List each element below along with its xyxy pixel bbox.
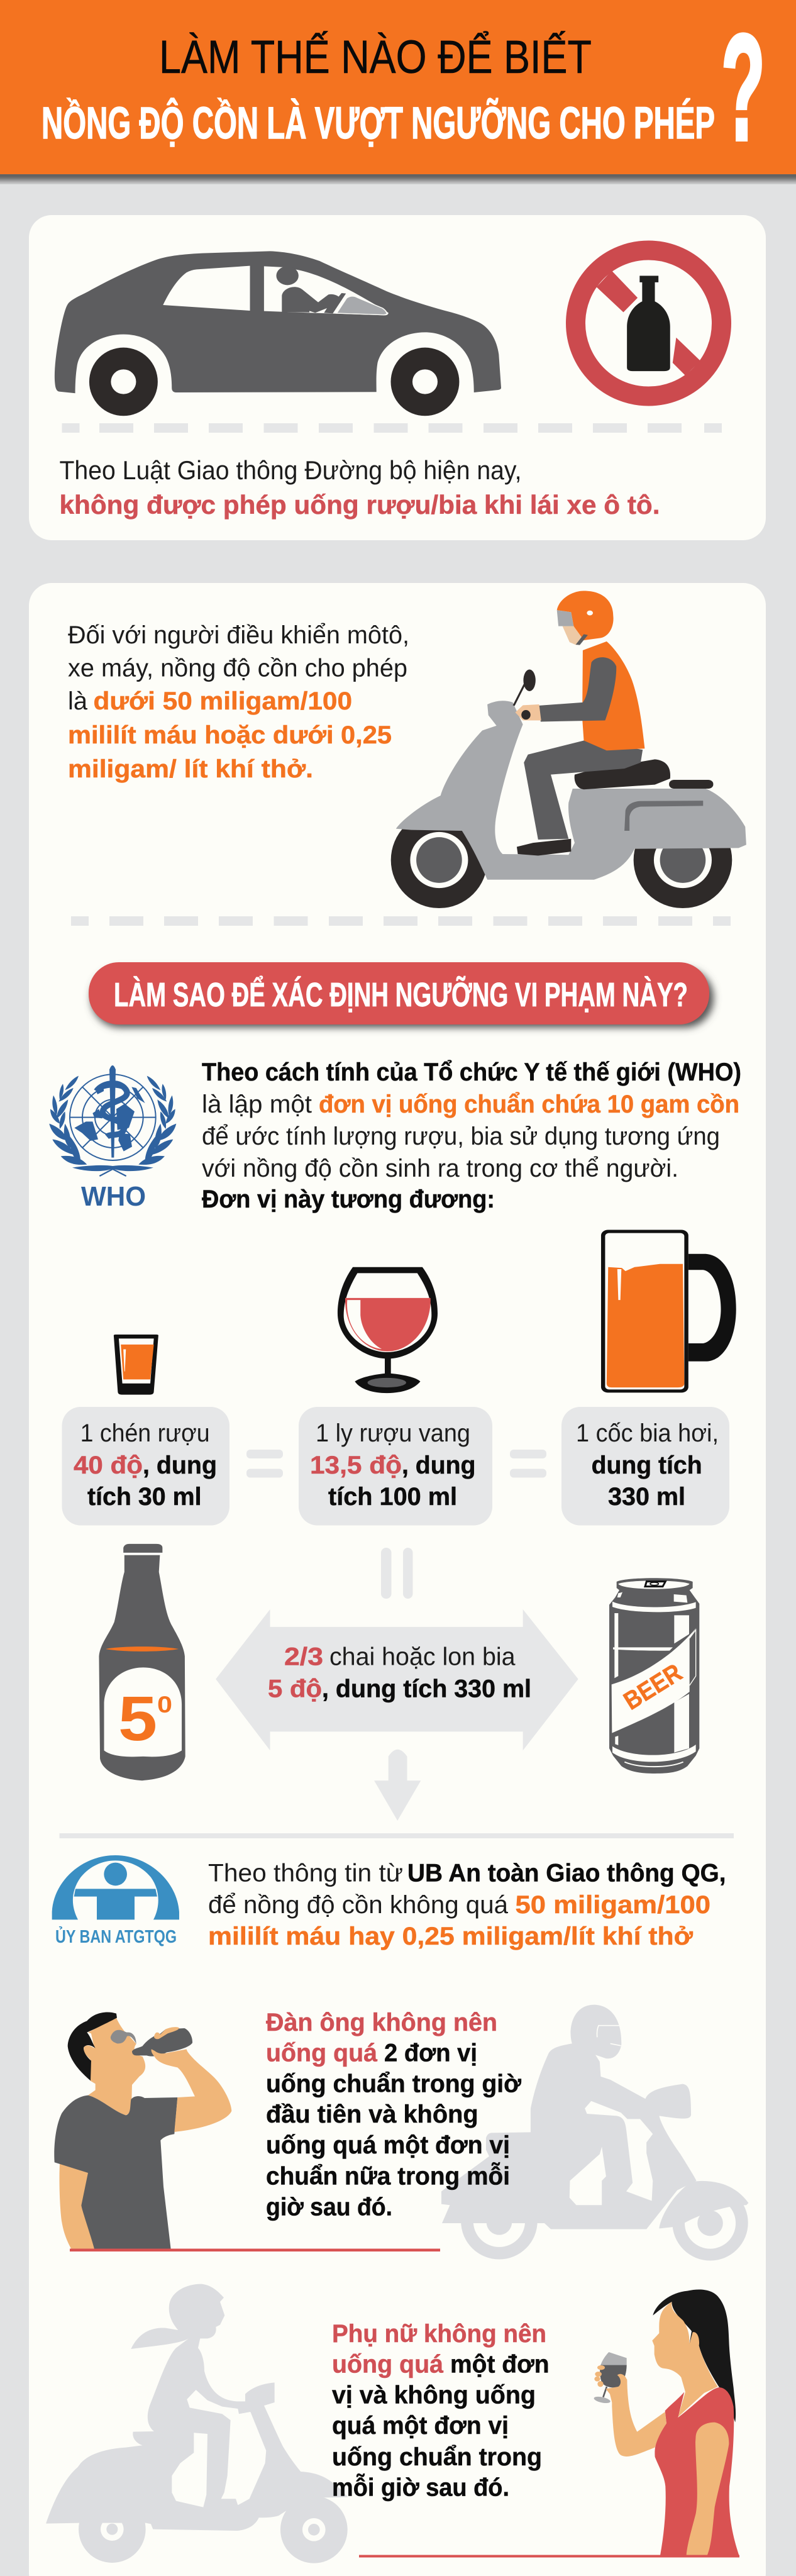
rule under man <box>70 2249 440 2251</box>
icon: beer can <box>609 1578 699 1774</box>
arrow: double-headed with text: 2/3 <box>284 1643 323 1670</box>
text: advice for women: mỗi giờ sau đó. <box>332 2473 509 2502</box>
text: advice for women: uống chuẩn trong <box>332 2443 542 2471</box>
text: advice for men: chuẩn nữa trong mỗi <box>266 2162 510 2190</box>
icon: beer bottle: 5 <box>118 1684 157 1754</box>
box: shot of liquor: 40 độ <box>74 1452 143 1479</box>
logo: national traffic safety committee <box>52 1855 179 1947</box>
box: draft beer: 330 ml <box>608 1483 685 1511</box>
rule under woman <box>359 2555 739 2557</box>
text: motorcycle limit: xe máy, nồng độ cồn cho phép <box>68 654 407 682</box>
illustration: woman with wine <box>594 2290 739 2557</box>
icon: equals sign <box>246 1450 283 1478</box>
text: committee information: mililít máu hay 0,25 miligam/lít khí thở <box>208 1923 694 1950</box>
text: advice for women: quá một đơn vị <box>332 2412 509 2440</box>
text: WHO explanation: Theo cách tính của Tổ chức Y tế thế giới (WHO) <box>202 1058 741 1086</box>
box: glass of wine: 1 ly rượu vang <box>316 1419 470 1447</box>
road dashes <box>62 423 722 433</box>
text: advice for men: uống quá một đơn vị <box>266 2131 510 2159</box>
icon: car <box>55 251 501 416</box>
arrow: double-headed with text: 5 độ <box>268 1675 322 1703</box>
text: committee information <box>208 1859 726 1950</box>
silhouette: female scooter rider <box>46 2284 348 2563</box>
icon: beer can: BEER <box>619 1658 687 1716</box>
box: draft beer: dung tích <box>592 1452 702 1479</box>
text: committee information: 50 miligam/100 <box>516 1891 710 1919</box>
icon: shot glass <box>114 1335 158 1395</box>
panel: car rule <box>29 215 766 540</box>
icon: wine glass <box>338 1267 438 1393</box>
title line 1: LÀM THẾ NÀO ĐỂ BIẾT <box>159 31 592 83</box>
icon: scooter rider <box>391 591 746 908</box>
box: draft beer <box>561 1407 729 1526</box>
text: WHO explanation: đơn vị uống chuẩn chứa 10 gam cồn <box>319 1091 739 1118</box>
box: shot of liquor: tích 30 ml <box>87 1483 201 1511</box>
text: advice for women: một đơn <box>450 2351 550 2379</box>
text: advice for women <box>332 2320 550 2502</box>
heading pill <box>89 962 714 1028</box>
arrow: down <box>374 1750 421 1821</box>
text: advice for men <box>266 2009 522 2221</box>
icon: vertical equals <box>381 1548 412 1599</box>
road dashes <box>71 916 731 926</box>
text: motorcycle limit: là <box>68 687 88 715</box>
box: shot of liquor <box>62 1407 229 1526</box>
text: committee information: để nồng độ cồn không quá <box>208 1891 509 1919</box>
icon: beer bottle: 0 <box>157 1692 172 1718</box>
text: committee information: UB An toàn Giao thông QG, <box>407 1859 726 1887</box>
text: WHO explanation: là lập một <box>202 1091 312 1118</box>
icon: beer bottle <box>99 1544 185 1780</box>
text: car rule: không được phép uống rượu/bia khi lái xe ô tô. <box>59 490 660 519</box>
box: draft beer: 1 cốc bia hơi, <box>576 1419 719 1447</box>
text: advice for men: Đàn ông không nên <box>266 2009 497 2036</box>
text: WHO explanation: với nồng độ cồn sinh ra trong cơ thể người. <box>202 1155 678 1182</box>
text: advice for women: Phụ nữ không nên <box>332 2320 546 2348</box>
illustration: man drinking beer <box>54 2012 231 2249</box>
header banner <box>0 0 796 180</box>
icon: beer mug <box>601 1230 736 1392</box>
logo: WHO: WHO <box>81 1181 146 1212</box>
text: committee information: Theo thông tin từ <box>208 1859 403 1887</box>
text: car rule: Theo Luật Giao thông Đường bộ hiện nay, <box>59 455 522 485</box>
text: advice for men: đầu tiên và không <box>266 2101 478 2128</box>
divider <box>59 1833 734 1838</box>
text: WHO explanation: Đơn vị này tương đương: <box>202 1185 495 1213</box>
text: advice for men: giờ sau đó. <box>266 2193 392 2221</box>
box: glass of wine: tích 100 ml <box>328 1483 457 1511</box>
text: motorcycle limit: miligam/ lít khí thở. <box>68 755 313 783</box>
text: advice for women: uống quá <box>332 2351 444 2379</box>
icon: no alcohol sign <box>576 250 722 396</box>
box: glass of wine <box>299 1407 492 1526</box>
arrow: double-headed with text: chai hoặc lon bia <box>329 1643 516 1670</box>
arrow: double-headed with text <box>216 1609 578 1750</box>
box: shot of liquor: 1 chén rượu <box>80 1419 210 1447</box>
text: motorcycle limit: Đối với người điều khiển môtô, <box>68 621 409 649</box>
box: glass of wine: , dung <box>402 1452 475 1479</box>
arrow: double-headed with text: , dung tích 330 ml <box>322 1675 531 1703</box>
text: advice for men: 2 đơn vị <box>384 2040 477 2067</box>
text: motorcycle limit: mililít máu hoặc dưới 0,25 <box>68 721 392 749</box>
text: motorcycle limit: dưới 50 miligam/100 <box>93 687 352 715</box>
text: WHO explanation: để ước tính lượng rượu, bia sử dụng tương ứng <box>202 1123 720 1150</box>
text: advice for men: uống chuẩn trong giờ <box>266 2070 522 2097</box>
text: car rule <box>59 455 660 519</box>
silhouette: male scooter rider <box>441 2005 748 2261</box>
box: glass of wine: 13,5 độ <box>310 1452 402 1479</box>
text: WHO explanation <box>202 1058 741 1213</box>
panel: motorcycle and WHO content <box>29 583 766 2576</box>
logo: national traffic safety committee: ỦY BAN ATGTQG <box>55 1926 177 1947</box>
icon: equals sign <box>510 1450 546 1478</box>
logo: WHO <box>49 1065 176 1212</box>
box: shot of liquor: , dung <box>143 1452 217 1479</box>
text: advice for men: uống quá <box>266 2040 378 2067</box>
text: motorcycle limit <box>68 621 409 783</box>
text: advice for women: vị và không uống <box>332 2381 536 2409</box>
